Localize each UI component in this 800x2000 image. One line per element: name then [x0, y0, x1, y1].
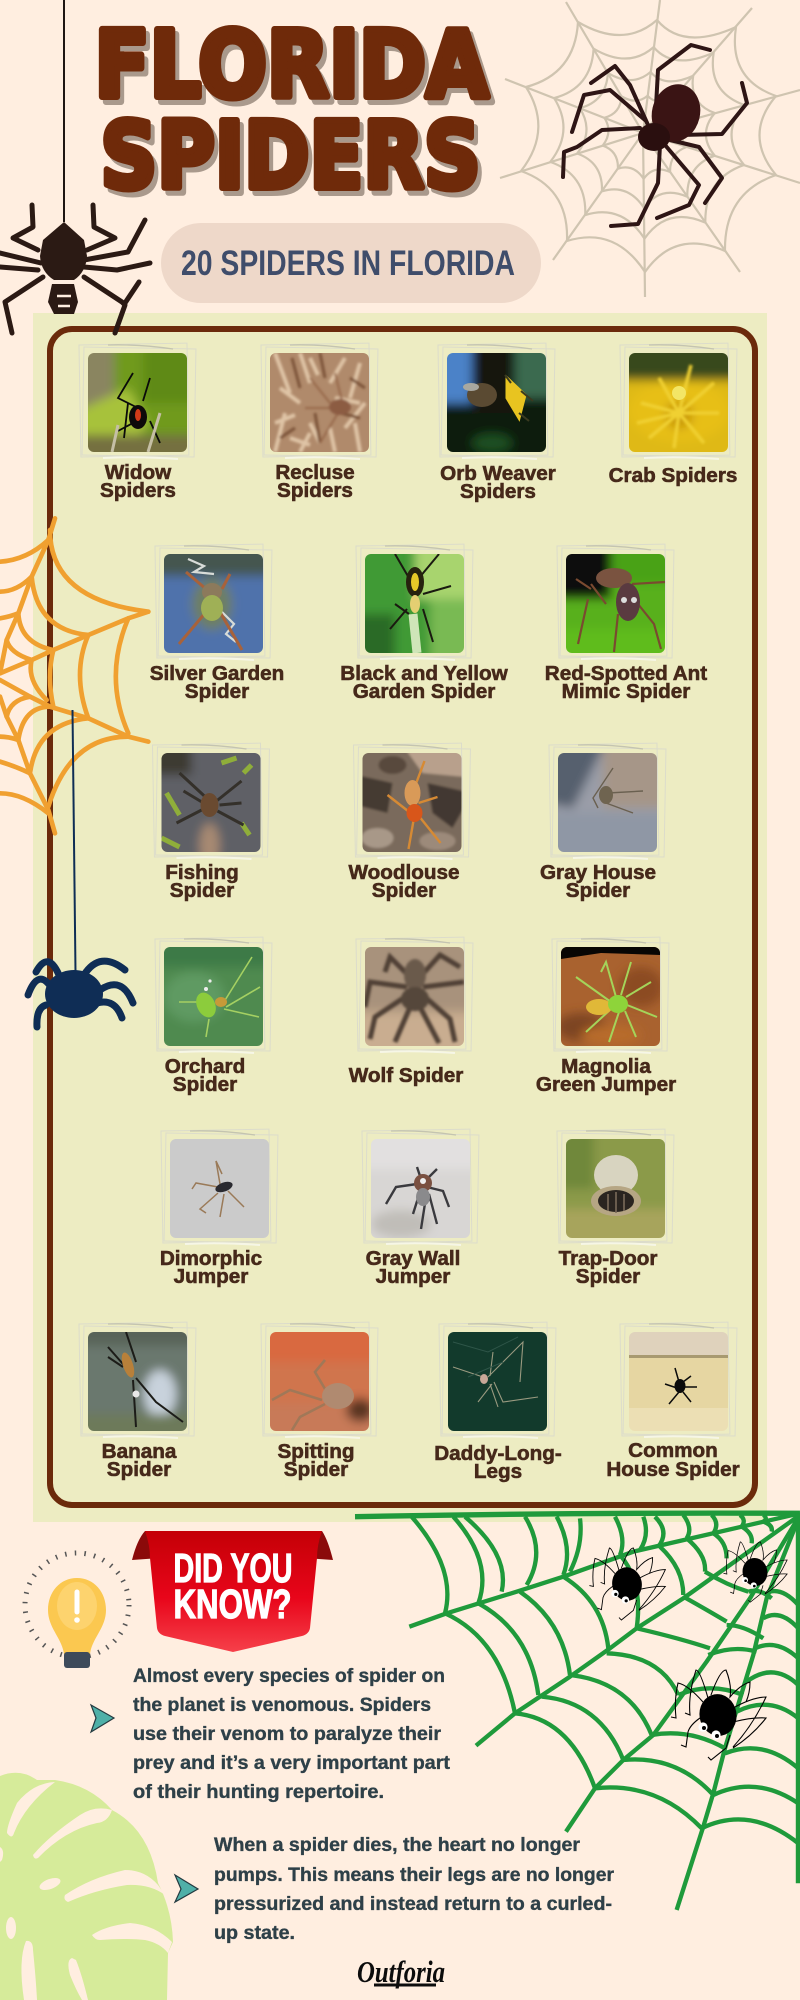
card: Gray House Spider: Gray House	[540, 861, 656, 884]
icon: large brown spider on web	[563, 45, 747, 226]
card: Recluse Spiders: Recluse	[275, 461, 355, 484]
card: Silver Garden Spider: Silver Garden	[150, 662, 284, 685]
icon: brown hanging spider	[0, 0, 150, 333]
card: Common House Spider: Common	[628, 1439, 718, 1462]
card: Gray Wall Jumper: Jumper	[376, 1265, 450, 1288]
card: Wolf Spider	[349, 932, 479, 1087]
card: Wolf Spider: Wolf Spider	[349, 1064, 463, 1087]
card: Fishing Spider	[152, 742, 270, 902]
logo: Outforia: Outforia	[357, 1954, 445, 1989]
card: Gray House Spider: Spider	[566, 879, 630, 902]
card: Gray Wall Jumper: Gray Wall	[366, 1247, 460, 1270]
card: Orchard Spider: Spider	[173, 1073, 237, 1096]
card: Banana Spider: Spider	[107, 1458, 171, 1481]
title	[94, 12, 492, 214]
text block one: the planet is venomous. Spiders	[133, 1695, 431, 1716]
card: Trap-Door Spider: Trap-Door	[559, 1247, 657, 1270]
web: green corner	[355, 1513, 800, 1910]
card: Daddy-Long-Legs: Legs	[474, 1460, 522, 1483]
banner: did you know: DID YOU	[174, 1545, 292, 1591]
card: Woodlouse Spider: Woodlouse	[348, 861, 460, 884]
card: Black and Yellow Garden Spider	[340, 539, 509, 703]
card: Black and Yellow Garden Spider: Garden Spider	[353, 680, 495, 703]
card: Magnolia Green Jumper: Green Jumper	[536, 1073, 676, 1096]
text block one: of their hunting repertoire.	[133, 1782, 384, 1803]
card: Widow Spiders	[78, 342, 196, 502]
card: Banana Spider: Banana	[102, 1440, 177, 1463]
card: Spitting Spider: Spitting	[278, 1440, 354, 1463]
spider web: top right	[500, 0, 800, 297]
icon: small spider three	[671, 1670, 766, 1760]
card: Dimorphic Jumper	[160, 1129, 278, 1288]
card: Fishing Spider: Fishing	[165, 861, 239, 884]
card: Orchard Spider	[154, 936, 272, 1096]
icon: navy hanging spider	[28, 710, 133, 1027]
panel: brown rounded border	[50, 329, 755, 1505]
title: FLORIDA	[94, 12, 488, 118]
card: Gray House Spider	[540, 738, 672, 902]
card: Magnolia Green Jumper: Magnolia	[561, 1055, 651, 1078]
banner: did you know: KNOW?	[174, 1581, 292, 1627]
text block two: pressurized and instead return to a curled-	[214, 1894, 612, 1915]
text block one: Almost every species of spider on	[133, 1666, 445, 1687]
card: Dimorphic Jumper: Dimorphic	[160, 1247, 262, 1270]
card: Orb Weaver Spiders	[438, 342, 556, 502]
card: Gray Wall Jumper	[362, 1128, 480, 1288]
text block two: pumps. This means their legs are no longer	[214, 1865, 615, 1886]
web: orange left	[0, 518, 148, 833]
card: Crab Spiders: Crab Spiders	[609, 464, 737, 487]
card: Orchard Spider: Orchard	[165, 1055, 245, 1078]
text block two	[214, 1835, 615, 1944]
card: Crab Spiders	[609, 338, 743, 487]
card: Dimorphic Jumper: Jumper	[174, 1265, 248, 1288]
card: Trap-Door Spider	[556, 1128, 674, 1288]
card: Trap-Door Spider: Spider	[576, 1265, 640, 1288]
text block one: prey and it’s a very important part	[133, 1753, 451, 1774]
card: Spitting Spider	[260, 1322, 378, 1480]
card: Banana Spider	[78, 1322, 196, 1480]
card: Common House Spider: House Spider	[606, 1458, 740, 1481]
card: Red-Spotted Ant Mimic Spider	[545, 539, 707, 703]
text block two: up state.	[214, 1923, 295, 1944]
card: Silver Garden Spider	[149, 539, 284, 703]
text block one	[133, 1666, 451, 1803]
arrow two	[175, 1875, 198, 1902]
card: Recluse Spiders: Spiders	[277, 479, 353, 502]
title: SPIDERS	[100, 102, 480, 210]
title: SPIDERS	[104, 108, 484, 214]
card: Spitting Spider: Spider	[284, 1458, 348, 1481]
arrow one	[91, 1705, 114, 1732]
panel: outer pale green background	[33, 313, 767, 1522]
banner: did you know	[132, 1531, 333, 1652]
card: Woodlouse Spider: Spider	[372, 879, 436, 902]
card: Widow Spiders: Widow	[105, 461, 172, 484]
card: Widow Spiders: Spiders	[100, 479, 176, 502]
card: Magnolia Green Jumper	[536, 937, 676, 1096]
icon: small spider two	[724, 1542, 787, 1602]
text block one: use their venom to paralyze their	[133, 1724, 442, 1745]
card: Fishing Spider: Spider	[170, 879, 234, 902]
card: Silver Garden Spider: Spider	[185, 680, 249, 703]
card: Orb Weaver Spiders: Spiders	[460, 480, 536, 503]
subtitle pill: 20 SPIDERS IN FLORIDA	[181, 244, 515, 283]
title: FLORIDA	[98, 16, 492, 124]
subtitle pill	[161, 223, 541, 303]
card: Recluse Spiders	[261, 343, 378, 502]
icon: small spider one	[589, 1548, 665, 1620]
icon: lightbulb	[25, 1553, 129, 1668]
card: Common House Spider	[606, 1317, 743, 1481]
leaf: pale green monstera	[0, 1773, 173, 2000]
card: Red-Spotted Ant Mimic Spider: Mimic Spider	[562, 680, 690, 703]
card: Black and Yellow Garden Spider: Black and Yellow	[340, 662, 509, 685]
card: Red-Spotted Ant Mimic Spider: Red-Spotted Ant	[545, 662, 707, 685]
card: Orb Weaver Spiders: Orb Weaver	[440, 462, 556, 485]
card: Woodlouse Spider	[348, 738, 476, 902]
text block two: When a spider dies, the heart no longer	[214, 1835, 581, 1856]
card: Daddy-Long-Legs: Daddy-Long-	[434, 1442, 562, 1465]
card: Daddy-Long-Legs	[434, 1322, 562, 1483]
